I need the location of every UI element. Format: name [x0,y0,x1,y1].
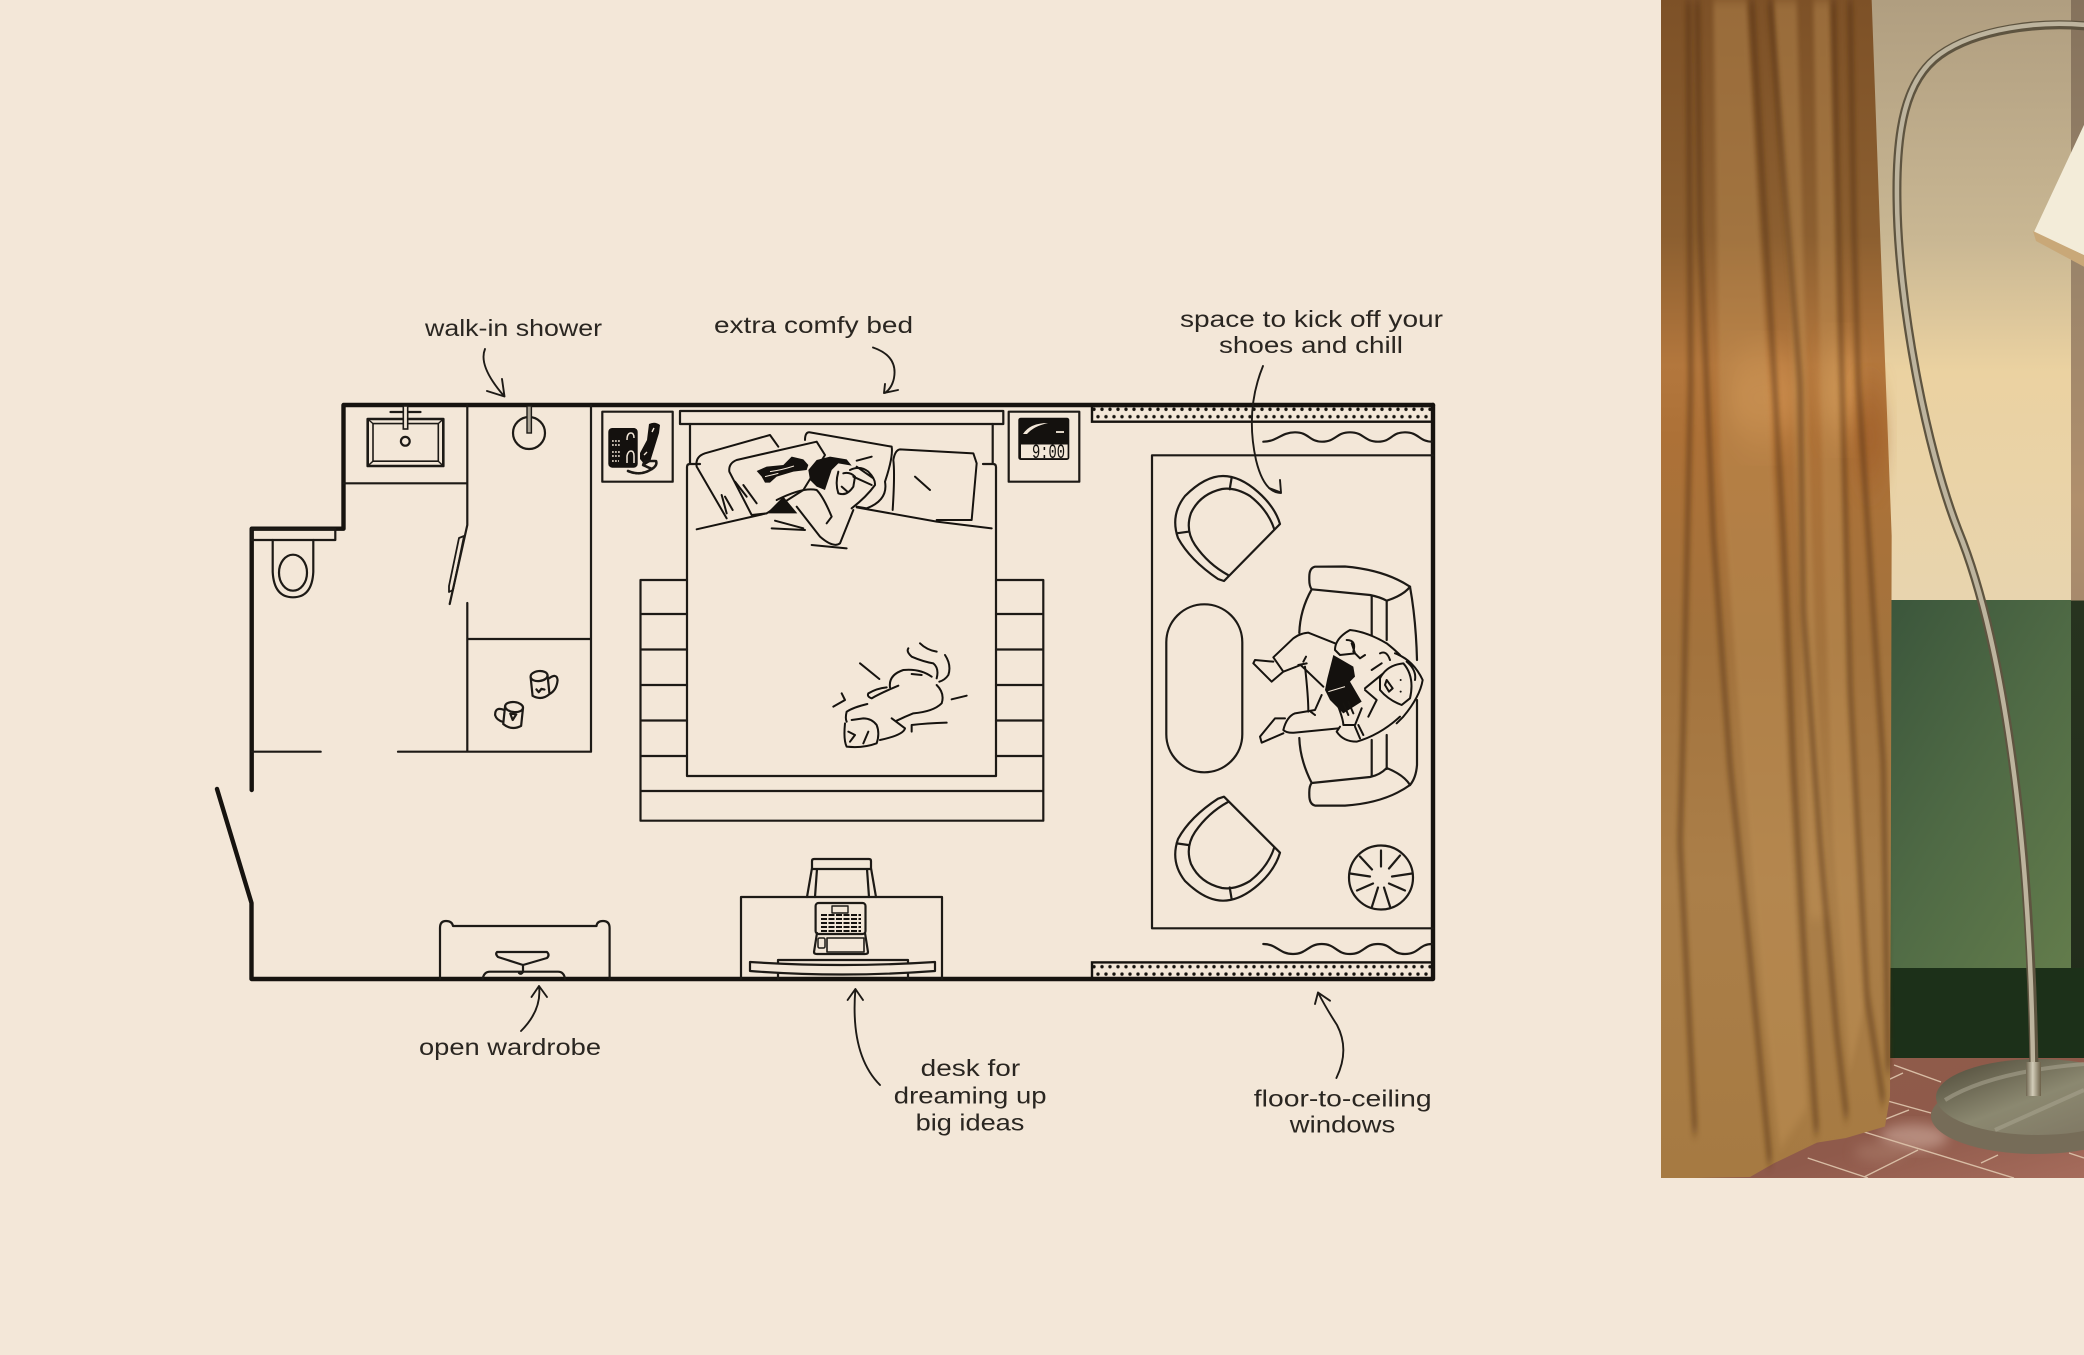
mugs [494,669,559,729]
arrow: extra comfy bed [873,348,898,393]
sink [368,406,443,466]
label: walk-in shower: walk-in shower [424,315,602,341]
desk with laptop and chair [741,859,942,979]
arrow: desk [848,989,880,1085]
desk top [741,897,942,979]
arrow: walk-in shower [484,349,504,396]
right and bottom walls [217,405,1433,979]
curtain [1661,0,1892,1179]
label: space to kick off your: space to kick off your [1180,306,1443,332]
lamp stem [1897,24,2084,1096]
bed headboard [680,411,1003,424]
bottom window band [1092,962,1433,979]
armchair bottom [1175,797,1280,901]
label: floor-to-ceiling: floor-to-ceiling [1254,1086,1432,1112]
right nightstand with alarm clock: 9:00 [1032,442,1065,465]
clothes hanger [496,952,548,974]
right nightstand with alarm clock [1009,412,1079,482]
drawer [778,960,908,979]
armchair top [1175,476,1280,581]
mug lower [494,700,524,729]
lounge rug [1152,455,1433,928]
label: dreaming up: dreaming up [894,1082,1046,1108]
label: shoes and chill: shoes and chill [1219,332,1403,358]
bed frame and mattress [687,424,996,776]
woman [757,457,875,548]
mug upper [530,669,559,699]
lamp base [1931,1059,2084,1154]
photo: curtain and floor lamp [1661,0,2084,1180]
label: big ideas: big ideas [916,1110,1024,1136]
wall green wainscot [1890,600,2071,968]
lamp shade [2033,125,2084,267]
laptop [814,903,868,954]
toilet [252,529,335,597]
chair [807,859,876,897]
floor plan [217,405,1433,979]
top curtain wave [1263,432,1432,442]
dog on bed [833,643,967,747]
sofa [1299,566,1417,806]
bottom curtain wave [1263,944,1432,954]
right door frame strip [2071,0,2084,1000]
terracotta floor [1661,1058,2084,1180]
arrow: open wardrobe [521,986,547,1031]
round pouf [1349,846,1413,910]
rug under bed [640,580,1043,821]
baseboard [1890,968,2084,1058]
pillows [696,432,977,520]
sleeping woman and pillows [696,432,992,548]
label: windows: windows [1289,1112,1395,1138]
arrow: lounge space [1252,366,1281,493]
left nightstand with phone [602,412,673,482]
oval coffee table [1166,604,1242,772]
label: desk for: desk for [921,1055,1020,1081]
arrow: windows [1315,992,1343,1078]
person reading on sofa [1253,630,1423,743]
label: extra comfy bed: extra comfy bed [714,312,913,338]
top window band [1092,406,1433,422]
blanket edge [697,507,992,529]
wall upper [1872,0,2071,600]
wardrobe [440,921,610,979]
shower door handle [449,536,464,592]
outer walls [252,405,1433,790]
bathroom partition walls [252,405,591,752]
shower head [513,406,545,449]
label: open wardrobe: open wardrobe [419,1034,601,1060]
